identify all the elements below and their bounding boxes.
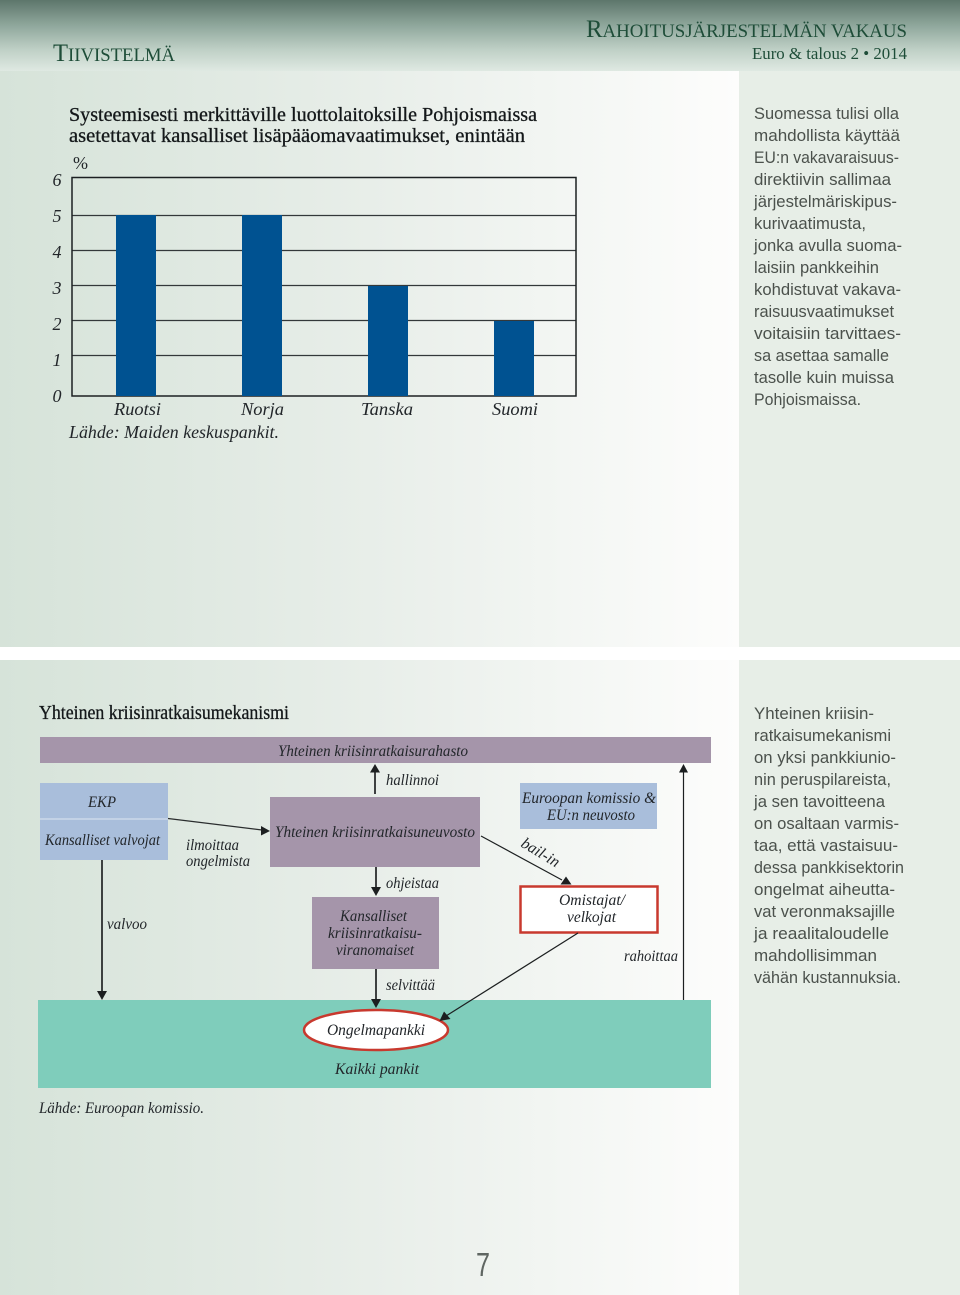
arrow: reports problems bbox=[168, 818, 270, 870]
text block: top sidebar: kohdistuvat vakava- bbox=[754, 280, 901, 299]
box: national authorities bbox=[312, 897, 439, 969]
y axis labels: 0 bbox=[52, 386, 62, 406]
text block: bottom sidebar: vat veronmaksajille bbox=[754, 902, 895, 921]
x axis labels: Suomi bbox=[492, 399, 538, 419]
arrow: instructs: ohjeistaa bbox=[386, 875, 439, 892]
y axis labels: 4 bbox=[52, 242, 62, 262]
arrow: instructs bbox=[371, 867, 439, 896]
text block: bottom sidebar: ratkaisumekanismi bbox=[754, 726, 891, 745]
text block: top sidebar: voitaisiin tarvittaes- bbox=[754, 324, 901, 343]
text block: bottom sidebar: vähän kustannuksia. bbox=[754, 968, 901, 987]
panel: bottom sidebar background bbox=[739, 660, 960, 1295]
box: all banks bbox=[38, 1000, 711, 1088]
text block: bottom sidebar: Yhteinen kriisin- bbox=[754, 704, 874, 723]
x axis labels bbox=[113, 399, 538, 419]
text block: top sidebar: raisuusvaatimukset bbox=[754, 302, 894, 321]
chart title: asetettavat kansalliset lisäpääomavaatimukset, enintään bbox=[69, 125, 525, 147]
panel: bottom background bbox=[0, 660, 739, 1295]
text block: top sidebar: Suomessa tulisi olla bbox=[754, 104, 900, 123]
issue line: Euro & talous 2 • 2014 bbox=[752, 44, 907, 63]
x axis labels: Tanska bbox=[361, 399, 413, 419]
publication title: RAHOITUSJÄRJESTELMÄN VAKAUS bbox=[586, 16, 907, 43]
text block: bottom sidebar: ja reaalitaloudelle bbox=[753, 924, 889, 943]
text block: top sidebar: laisiin pankkeihin bbox=[754, 258, 879, 277]
text block: top sidebar bbox=[753, 104, 902, 409]
box: commission and council bbox=[520, 783, 657, 829]
text block: bottom sidebar: on osaltaan varmis- bbox=[754, 814, 899, 833]
text block: bottom sidebar: taa, että vastaisuu- bbox=[754, 836, 898, 855]
section title: TIIVISTELMÄ bbox=[53, 40, 175, 67]
box: national authorities: Kansalliset bbox=[339, 908, 408, 925]
box: owners and creditors: Omistajat/ bbox=[559, 892, 627, 909]
arrow: supervises: valvoo bbox=[107, 916, 147, 933]
unit label: % bbox=[73, 153, 88, 173]
box: supervisors: EKP bbox=[87, 794, 116, 811]
box: commission and council: EU:n neuvosto bbox=[546, 807, 635, 824]
box: national authorities: viranomaiset bbox=[336, 942, 415, 959]
text block: top sidebar: mahdollista käyttää bbox=[754, 126, 901, 145]
box: resolution board: Yhteinen kriisinratkaisuneuvosto bbox=[275, 824, 475, 841]
text block: top sidebar: Pohjoismaissa. bbox=[754, 390, 861, 409]
ellipse: problem bank bbox=[304, 1010, 448, 1050]
panel: top sidebar background bbox=[739, 71, 960, 647]
text block: top sidebar: tasolle kuin muissa bbox=[754, 368, 895, 387]
box: owners and creditors: velkojat bbox=[567, 909, 617, 926]
text block: bottom sidebar bbox=[753, 704, 904, 987]
box: supervisors bbox=[40, 783, 168, 860]
text block: bottom sidebar: ja sen tavoitteena bbox=[753, 792, 886, 811]
chart title: Systeemisesti merkittäville luottolaitoksille Pohjoismaissa bbox=[69, 104, 537, 126]
text block: top sidebar: jonka avulla suoma- bbox=[753, 236, 902, 255]
arrow: supervises bbox=[97, 860, 147, 1000]
y axis labels: 1 bbox=[52, 350, 62, 370]
y axis labels: 3 bbox=[52, 278, 62, 298]
y axis labels: 5 bbox=[52, 206, 62, 226]
chart source: Lähde: Maiden keskuspankit. bbox=[68, 422, 279, 442]
text block: bottom sidebar: nin peruspilareista, bbox=[754, 770, 891, 789]
arrow: reports problems: ilmoittaa bbox=[186, 837, 239, 854]
arrow: manages bbox=[370, 764, 439, 794]
x axis labels: Norja bbox=[240, 399, 284, 419]
box: owners and creditors bbox=[520, 886, 658, 932]
arrow: reports problems: ongelmista bbox=[186, 853, 250, 870]
box: all banks: Kaikki pankit bbox=[334, 1061, 420, 1078]
box: supervisors: Kansalliset valvojat bbox=[44, 832, 161, 849]
bars bbox=[116, 215, 534, 396]
x axis labels: Ruotsi bbox=[113, 399, 161, 419]
box: resolution fund: Yhteinen kriisinratkaisurahasto bbox=[278, 743, 468, 760]
bar chart bbox=[52, 153, 576, 419]
arrow: funds bbox=[624, 764, 688, 1000]
text block: bottom sidebar: ongelmat aiheutta- bbox=[754, 880, 895, 899]
y axis labels: 6 bbox=[52, 170, 62, 190]
arrow: resolves: selvittää bbox=[386, 977, 435, 994]
text block: top sidebar: direktiivin sallimaa bbox=[754, 170, 892, 189]
chart title bbox=[69, 104, 537, 147]
arrow: resolves bbox=[371, 969, 435, 1008]
text block: bottom sidebar: dessa pankkisektorin bbox=[754, 858, 904, 877]
y axis labels bbox=[52, 170, 62, 406]
box: national authorities: kriisinratkaisu- bbox=[328, 925, 422, 942]
diagram source: Lähde: Euroopan komissio. bbox=[38, 1100, 204, 1117]
text block: top sidebar: sa asettaa samalle bbox=[754, 346, 889, 365]
box: resolution fund bbox=[40, 737, 711, 763]
diagram title: Yhteinen kriisinratkaisumekanismi bbox=[39, 702, 289, 724]
header band bbox=[0, 0, 960, 71]
y axis labels: 2 bbox=[52, 314, 62, 334]
text block: top sidebar: kurivaatimusta, bbox=[754, 214, 866, 233]
box: commission and council: Euroopan komissio & bbox=[521, 790, 657, 807]
arrow: bail-in bbox=[481, 835, 572, 884]
text block: top sidebar: EU:n vakavaraisuus- bbox=[754, 148, 899, 167]
page number: 7 bbox=[476, 1246, 490, 1283]
arrow: owners to problem bank bbox=[440, 933, 578, 1021]
text block: bottom sidebar: on yksi pankkiunio- bbox=[754, 748, 896, 767]
panel: top background bbox=[0, 71, 739, 647]
text block: bottom sidebar: mahdollisimman bbox=[754, 946, 877, 965]
flow diagram bbox=[38, 737, 711, 1088]
text block: top sidebar: järjestelmäriskipus- bbox=[753, 192, 897, 211]
arrow: bail-in: bail-in bbox=[518, 835, 563, 871]
ellipse: problem bank: Ongelmapankki bbox=[327, 1022, 425, 1039]
arrow: manages: hallinnoi bbox=[386, 772, 439, 789]
box: resolution board bbox=[270, 797, 480, 867]
arrow: funds: rahoittaa bbox=[624, 948, 678, 965]
